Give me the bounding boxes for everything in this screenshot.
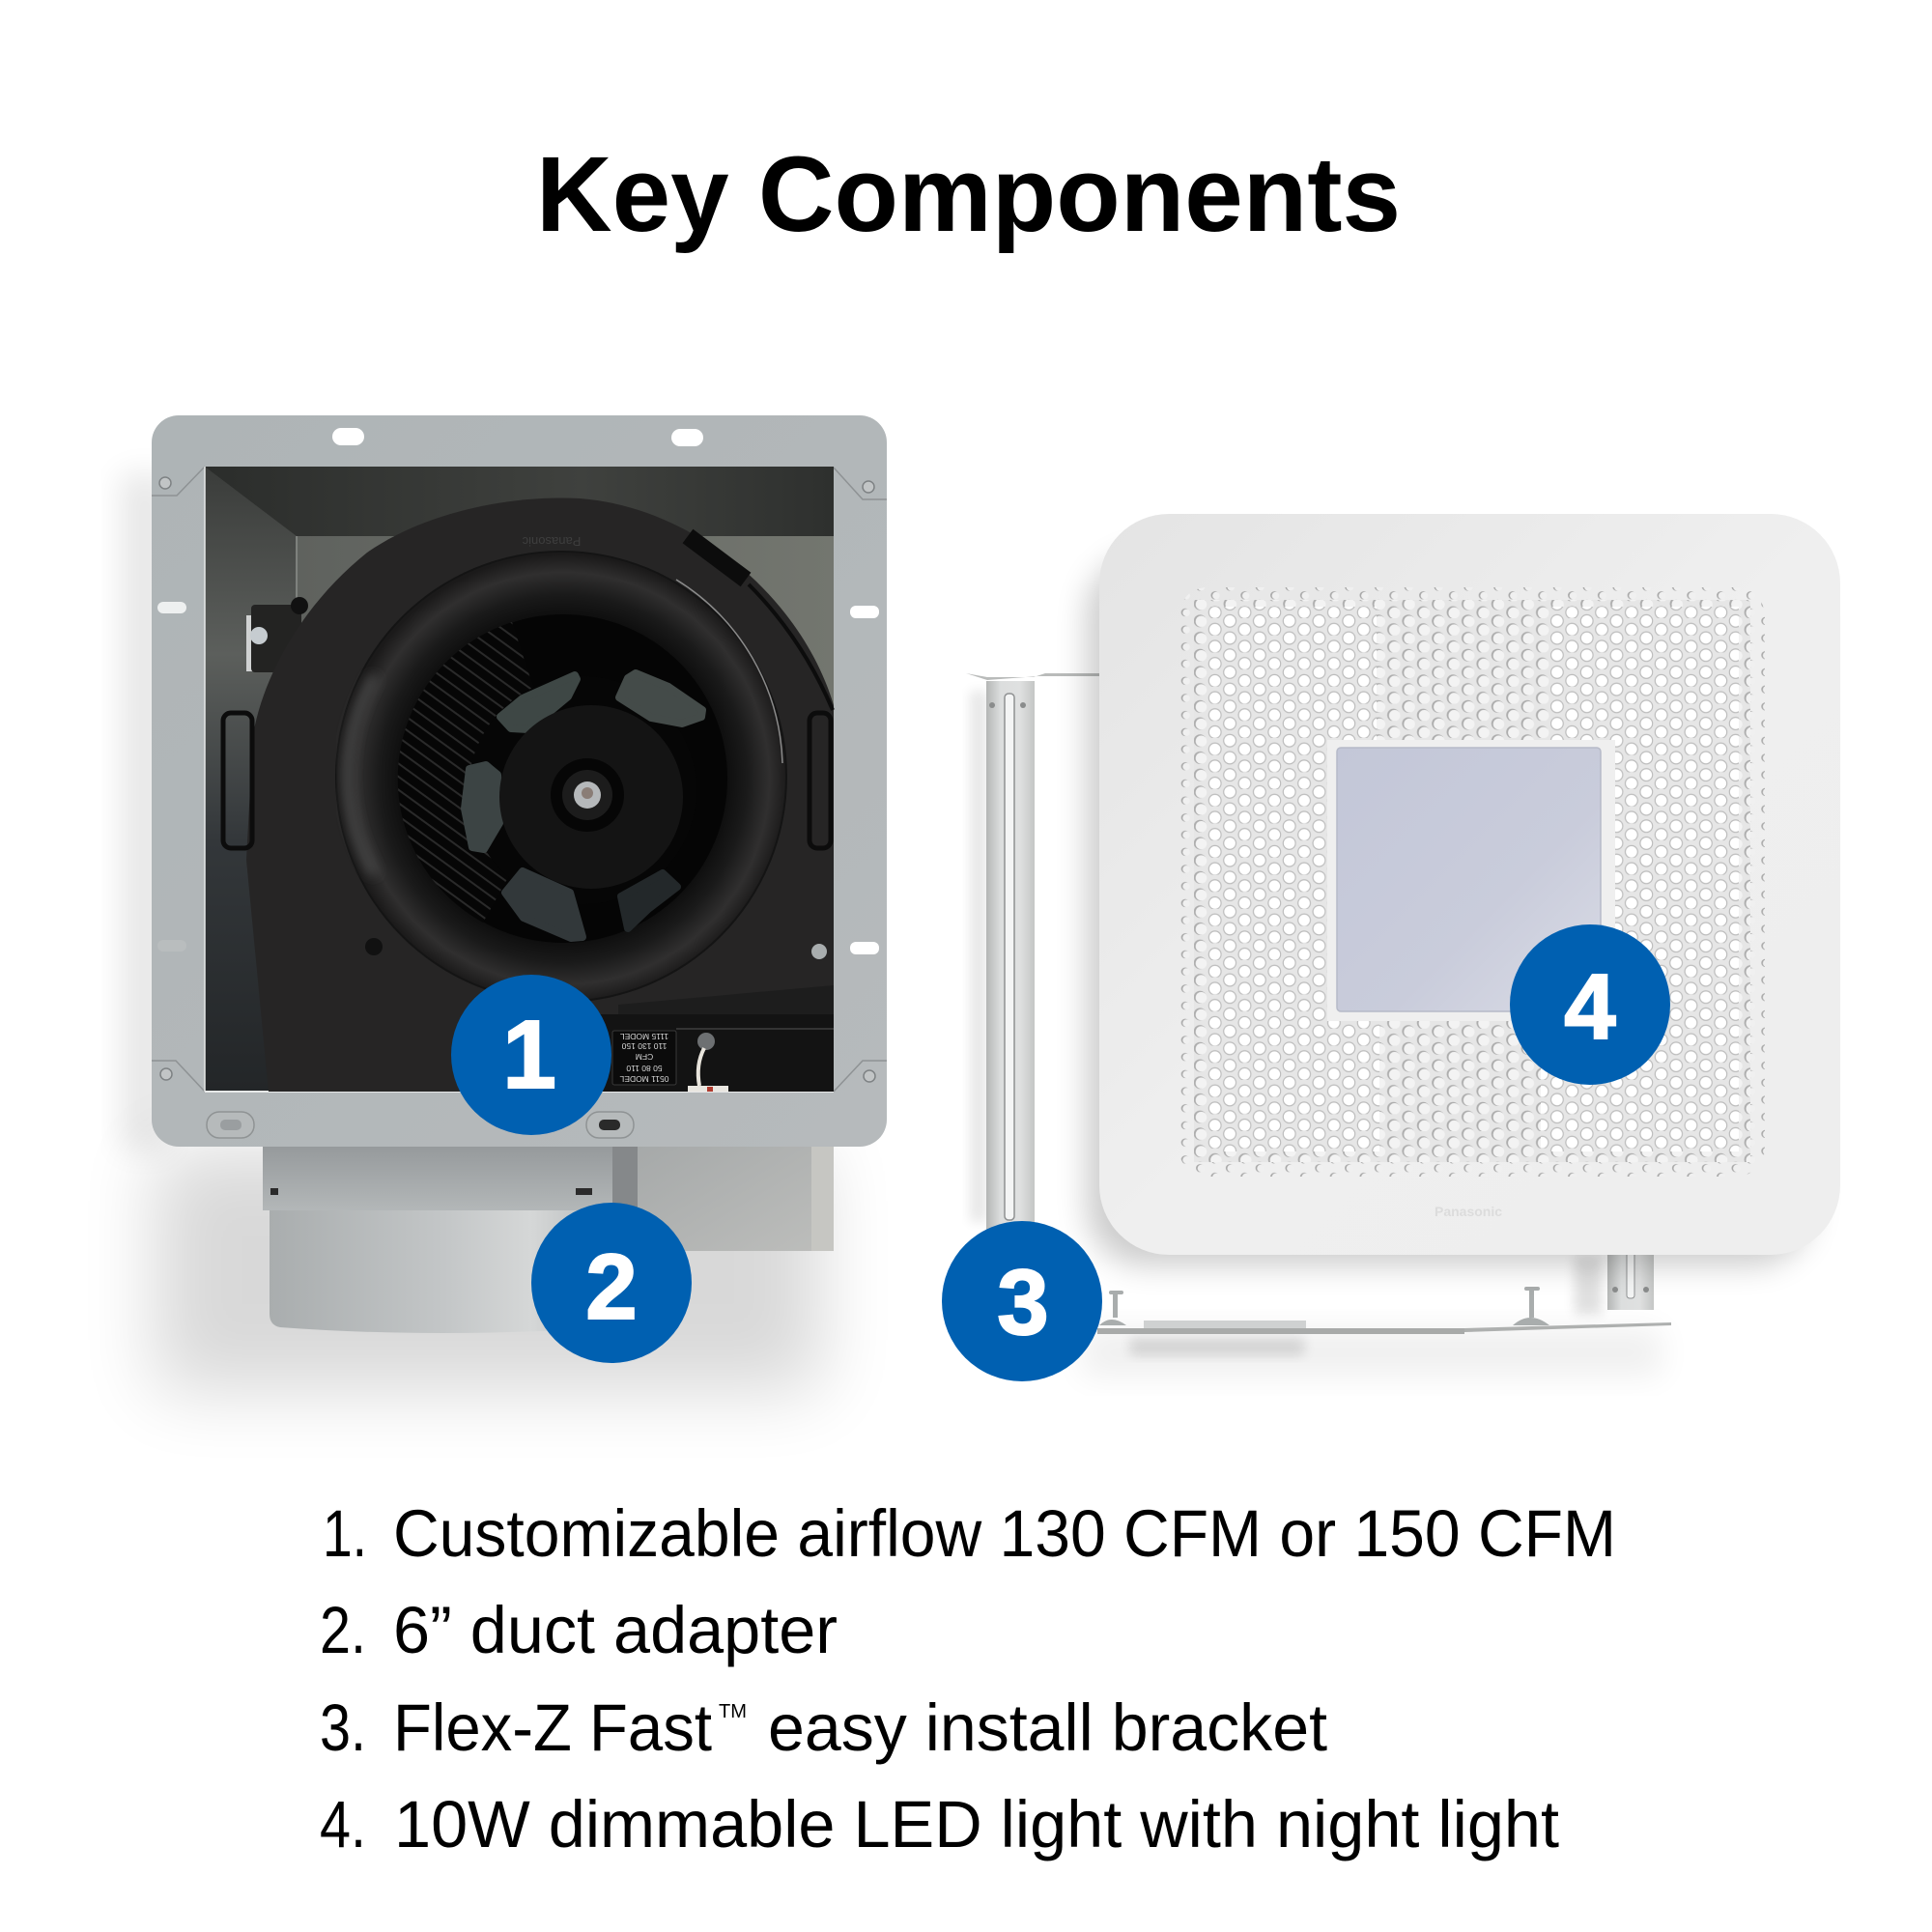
- number badge 2: [531, 1203, 692, 1363]
- list item 3: 3.: [320, 1690, 366, 1765]
- CFM switch label: 0511 MODEL: [619, 1074, 668, 1084]
- clear zone around light: [1327, 740, 1615, 1021]
- list item 1: Customizable airflow 130 CFM or 150 CFM: [393, 1496, 1616, 1571]
- list item 4: 10W dimmable LED light with night light: [394, 1787, 1559, 1861]
- duct adapter: [263, 1147, 618, 1333]
- list item 3: Flex-Z Fast: [393, 1690, 712, 1765]
- lower control panel area: [599, 985, 834, 1092]
- number badge 1: 1: [502, 1001, 556, 1109]
- left vertical rail: [966, 673, 1101, 1232]
- list item 3: easy install bracket: [768, 1690, 1327, 1765]
- metal mounting frame: [152, 415, 887, 1147]
- black blower housing: [246, 497, 834, 1092]
- install screws: [1099, 1287, 1549, 1325]
- CFM switch label: [612, 1031, 676, 1085]
- blower ring: [335, 551, 787, 1003]
- number badge 4: [1510, 924, 1670, 1085]
- list item 1: 1.: [323, 1496, 367, 1571]
- number badge 3: [942, 1221, 1102, 1381]
- number badge 4: 4: [1564, 955, 1616, 1059]
- list item 3: [320, 1690, 1327, 1765]
- wing screw and silver screw: [365, 938, 827, 959]
- list item 4: 4.: [320, 1787, 366, 1861]
- number badge 1: [451, 975, 611, 1135]
- CFM switch label: 50 80 110: [626, 1064, 663, 1073]
- component list: [320, 1496, 1616, 1861]
- impeller hub and spokes: [465, 673, 702, 938]
- interior walls: [205, 467, 834, 1092]
- product photo: fan housing unit: [121, 415, 887, 1391]
- grille brand mark: Panasonic: [1435, 1204, 1502, 1219]
- grille body: [1099, 514, 1840, 1255]
- side junction box: [612, 1147, 834, 1251]
- perforation: dimple field: [1194, 600, 1750, 1162]
- bottom rail: [1097, 1321, 1671, 1334]
- number badge 2: 2: [585, 1236, 638, 1339]
- title: Key Components: [536, 135, 1401, 254]
- CFM switch label: 110 130 150: [621, 1041, 667, 1051]
- list item 2: 6” duct adapter: [393, 1593, 838, 1667]
- perforation: small outer dimples: [1179, 587, 1765, 1177]
- embossed brand on housing: Panasonic: [522, 534, 581, 549]
- motor bracket and bolt: [246, 597, 308, 672]
- list item 3: TM: [719, 1701, 747, 1722]
- CFM switch label: CFM: [636, 1052, 653, 1062]
- wire and connector: [688, 1033, 728, 1092]
- housing clips and strap: [223, 536, 833, 848]
- number badge 3: 3: [997, 1251, 1049, 1354]
- perforation: through holes: [1208, 607, 1739, 1151]
- CFM switch label: 1115 MODEL: [620, 1032, 668, 1041]
- grille drop shadow: [1087, 555, 1811, 1265]
- impeller blades: [398, 622, 563, 923]
- right rail stub: [1607, 1252, 1654, 1310]
- product photo: grille with LED light: [1087, 514, 1840, 1265]
- bracket shadows: [970, 691, 1662, 1377]
- LED light panel: [1337, 748, 1601, 1011]
- product photo: mounting bracket: [966, 673, 1671, 1377]
- soft drop shadow of fan unit: [121, 473, 821, 1391]
- perforation: dimples: [1194, 600, 1750, 1162]
- list item 2: 2.: [320, 1593, 366, 1667]
